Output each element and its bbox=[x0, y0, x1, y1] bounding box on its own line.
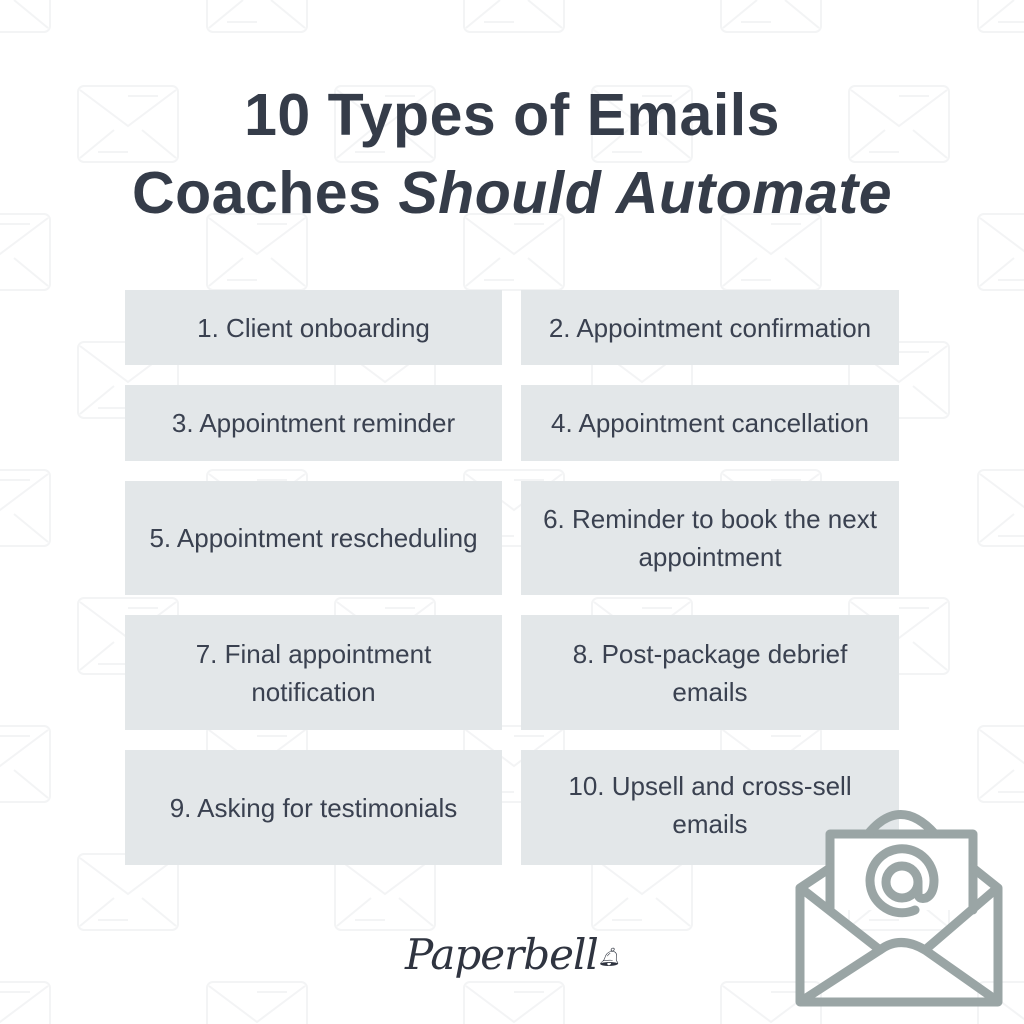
icon: open envelope with @ bbox=[796, 810, 1002, 1006]
item 7: notification bbox=[251, 676, 376, 706]
title: 10 Types of Emails bbox=[244, 82, 780, 148]
item 9: 9. Asking for testimonials bbox=[170, 792, 457, 822]
item 1 bbox=[125, 290, 502, 365]
item 6: 6. Reminder to book the next bbox=[543, 504, 877, 534]
item 6: appointment bbox=[638, 542, 782, 572]
item 7: 7. Final appointment bbox=[196, 638, 431, 668]
item 9 bbox=[125, 750, 502, 865]
item 5: 5. Appointment rescheduling bbox=[149, 523, 478, 553]
item 10: emails bbox=[672, 809, 748, 839]
item 2: 2. Appointment confirmation bbox=[549, 312, 871, 342]
item 3: 3. Appointment reminder bbox=[172, 408, 455, 438]
item 1: 1. Client onboarding bbox=[197, 312, 430, 342]
item 4: 4. Appointment cancellation bbox=[551, 408, 869, 438]
item 10: 10. Upsell and cross-sell bbox=[568, 771, 852, 801]
item 2 bbox=[521, 290, 899, 365]
item 5 bbox=[125, 481, 502, 595]
item 8 bbox=[521, 615, 899, 730]
item 8: emails bbox=[672, 676, 748, 706]
item 10 bbox=[521, 750, 899, 865]
title: Coaches Should Automate bbox=[132, 160, 892, 226]
title bbox=[132, 82, 892, 226]
logo: Paperbell: Paperbell🔔︎ bbox=[405, 930, 620, 979]
item 6 bbox=[521, 481, 899, 595]
item 8: 8. Post-package debrief bbox=[573, 638, 847, 668]
item 3 bbox=[125, 385, 502, 461]
item 7 bbox=[125, 615, 502, 730]
item 4 bbox=[521, 385, 899, 461]
